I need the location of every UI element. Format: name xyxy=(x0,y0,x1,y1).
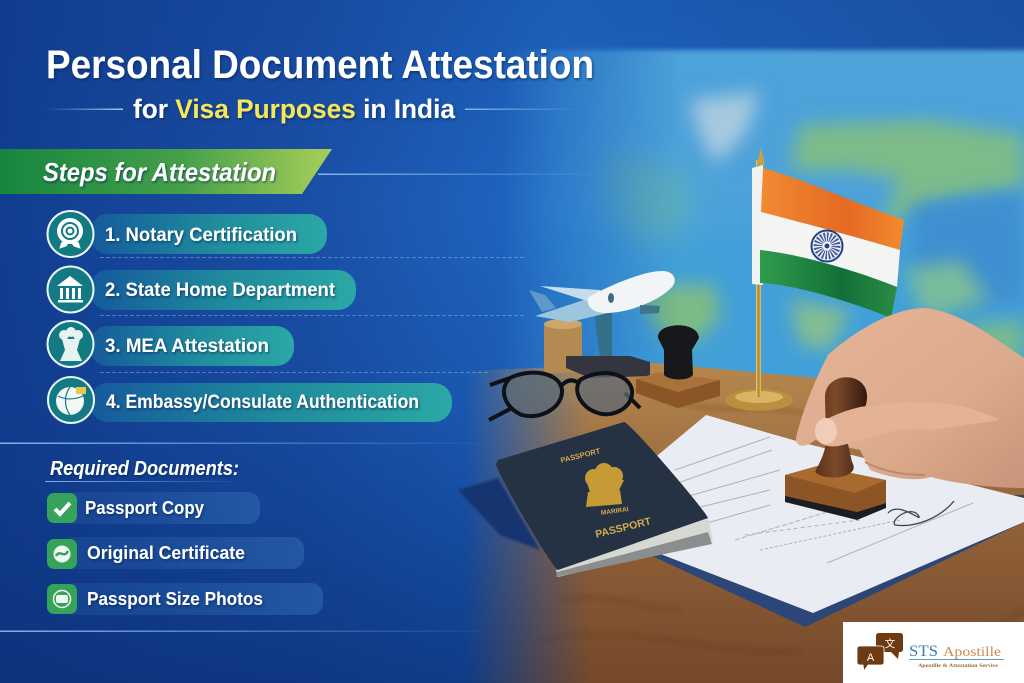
icon: globe with flag xyxy=(56,387,86,415)
blue booklet under passport xyxy=(458,478,540,550)
icon: award rosette xyxy=(57,218,83,248)
dashed separators xyxy=(100,258,525,372)
Indian flag xyxy=(752,165,904,318)
step 2: state home department: 2. State Home Department xyxy=(105,279,335,301)
icon: check mark xyxy=(55,503,70,514)
logo: STS Apostille xyxy=(843,622,1024,683)
heading banner: steps for attestation xyxy=(0,149,608,194)
black rubber stamp on wooden block xyxy=(636,325,720,408)
icon: translation bubbles: 文 xyxy=(885,637,896,650)
icon: translation bubbles: A xyxy=(867,652,875,664)
airplane model xyxy=(529,271,675,378)
icon: national emblem xyxy=(59,327,83,361)
icon: photo xyxy=(54,590,70,608)
flag pole with brass base xyxy=(725,147,793,411)
passport: MARIRAI xyxy=(601,506,629,517)
logo: STS Apostille: STS xyxy=(909,643,938,660)
logo: STS Apostille: Apostille xyxy=(943,645,1001,660)
step 4: embassy/consulate authentication: 4. Embassy/Consulate Authentication xyxy=(106,391,419,413)
step 1: notary certification xyxy=(48,211,327,257)
step 4: embassy/consulate authentication xyxy=(48,377,452,423)
step 2: state home department xyxy=(48,266,356,312)
document: passport copy: Passport Copy xyxy=(85,498,204,518)
required documents heading: Required Documents: xyxy=(50,458,239,480)
world map backdrop xyxy=(523,47,1024,378)
document: original certificate xyxy=(47,537,304,569)
logo: STS Apostille: Apostille & Attestation Service xyxy=(918,663,999,669)
step 3: MEA attestation xyxy=(48,321,294,367)
ashoka chakra xyxy=(812,230,842,262)
heading banner: steps for attestation: Steps for Attestation xyxy=(43,157,276,187)
eyeglasses xyxy=(489,373,640,420)
document: passport copy xyxy=(47,492,260,524)
passport xyxy=(496,422,713,577)
attestation document xyxy=(640,415,1024,627)
document: original certificate: Original Certificate xyxy=(87,543,245,563)
icon: certificate seal xyxy=(54,546,70,562)
passport: PASSPORT xyxy=(594,515,653,541)
hand with wooden stamp xyxy=(785,308,1024,520)
icon: translation bubbles xyxy=(857,633,903,671)
title rules xyxy=(45,108,580,110)
title: for Visa Purposes in India xyxy=(133,94,456,124)
title: Personal Document Attestation xyxy=(46,43,594,87)
passport emblem xyxy=(585,463,624,507)
title xyxy=(46,43,594,124)
step 3: MEA attestation: 3. MEA Attestation xyxy=(105,335,269,357)
step 1: notary certification: 1. Notary Certification xyxy=(105,224,297,246)
icon: government building xyxy=(57,276,83,302)
passport: PASSPORT xyxy=(560,446,602,465)
document: passport size photos xyxy=(47,583,323,615)
desk grain xyxy=(678,403,804,610)
wooden desk xyxy=(440,363,1024,683)
document: passport size photos: Passport Size Photos xyxy=(87,589,263,609)
